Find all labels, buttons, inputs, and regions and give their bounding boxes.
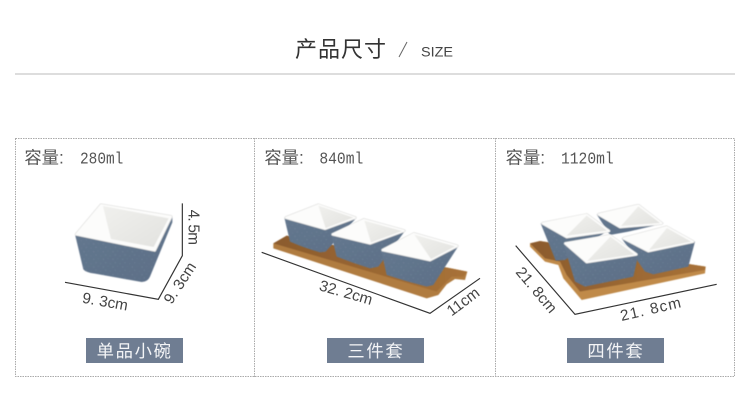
icon: bowl front right — [622, 227, 695, 274]
capacity: 1120ml: 1120ml — [561, 150, 614, 169]
icon: wooden tray — [273, 236, 467, 298]
dimension: 32.2cm: 32. 2cm — [317, 278, 374, 309]
label: single bowl — [86, 338, 183, 363]
capacity: 840ml — [264, 148, 363, 169]
capacity: 840ml: 840ml — [319, 150, 363, 169]
icon: bowl two — [331, 220, 406, 268]
panel: single bowl — [24, 148, 201, 363]
dimension: 21.8cm depth: 21. 8cm — [512, 264, 560, 317]
panel: three-piece set — [262, 148, 483, 363]
heading — [295, 37, 453, 62]
subtitle: SIZE — [421, 44, 453, 60]
capacity: 280ml: 280ml — [80, 150, 123, 169]
icon: bowl one — [284, 205, 357, 252]
title: 产品尺寸 — [295, 37, 387, 62]
icon: bowl three — [381, 234, 459, 287]
panel: four-piece set — [506, 148, 717, 363]
icon: bowl back right — [597, 205, 664, 235]
capacity: 280ml: 容量: — [24, 148, 64, 168]
dimension lines — [262, 252, 480, 313]
dimension: 21.8cm width: 21. 8cm — [619, 294, 683, 325]
icon: single bowl — [75, 205, 172, 282]
icon: bowl back left — [541, 215, 611, 261]
dimension: 4.5m height: 4. 5m — [184, 210, 201, 245]
label: three-piece set — [327, 338, 424, 363]
dimension: 9.3cm depth: 9. 3cm — [161, 259, 200, 307]
dimension: 9.3cm width: 9. 3cm — [81, 290, 129, 315]
icon: bowl front left — [563, 236, 638, 287]
capacity: 1120ml — [506, 148, 614, 169]
capacity: 280ml — [24, 148, 123, 169]
dimension lines — [65, 203, 182, 299]
dimension: 11cm: 11cm — [444, 284, 483, 320]
capacity: 1120ml: 容量: — [506, 148, 545, 168]
label: single bowl: 单品小碗 — [97, 341, 173, 361]
label: four-piece set: 四件套 — [587, 341, 644, 361]
label: four-piece set — [567, 338, 664, 363]
label: three-piece set: 三件套 — [347, 341, 404, 361]
capacity: 840ml: 容量: — [264, 148, 304, 168]
dimension lines — [516, 246, 717, 314]
subtitle slash — [399, 42, 407, 57]
icon: wooden tray — [530, 241, 706, 300]
